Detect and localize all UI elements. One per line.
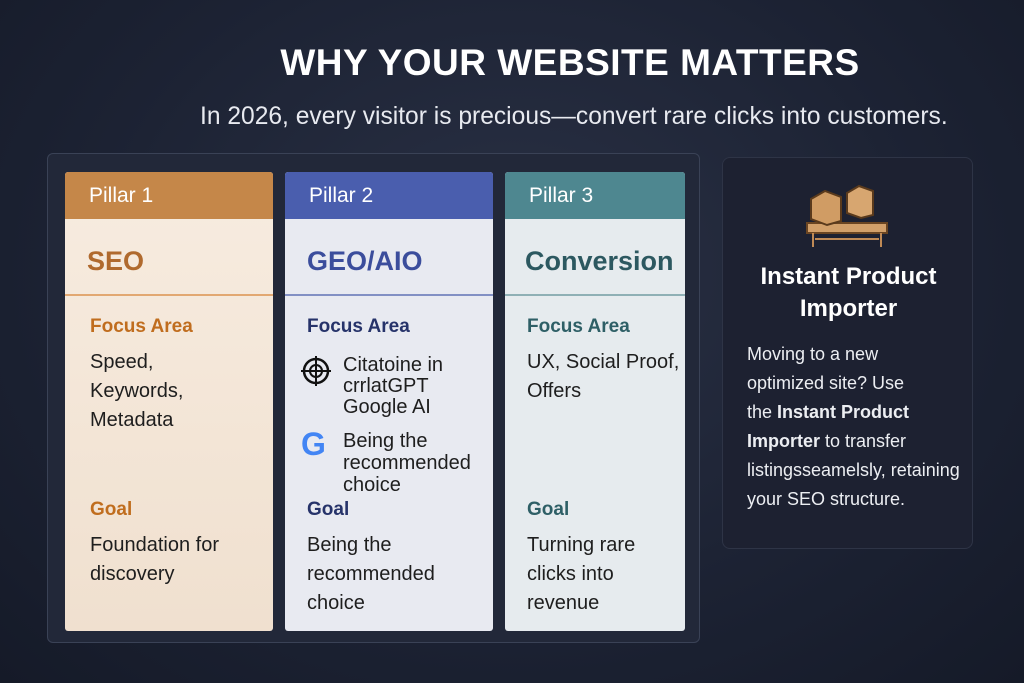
panel: pillars (47, 153, 700, 643)
pillar 2: Google AI (343, 396, 431, 418)
title: WHY YOUR WEBSITE MATTERS (280, 42, 860, 83)
pillar 1: Goal (90, 499, 132, 520)
heading (760, 263, 936, 322)
pillar 2: recommended (307, 563, 435, 585)
pillar 3: Pillar 3 (529, 184, 593, 207)
pillar 3: Goal (527, 499, 569, 520)
heading: Importer (800, 295, 897, 322)
pillar 3: Focus Area (527, 316, 630, 337)
icon: boxes on conveyor (806, 185, 888, 247)
pillar 2: Citatoine in (343, 354, 443, 376)
pillar 1: SEO (87, 246, 144, 276)
pillar 1: Focus Area (90, 316, 193, 337)
icon: google G: G (301, 426, 326, 462)
pillar 1: Speed, (90, 351, 153, 373)
description: optimized site? Use (747, 373, 904, 393)
pillar 3: Offers (527, 380, 581, 402)
pillar 2: Goal (307, 499, 349, 520)
pillar 1: Keywords, (90, 380, 183, 402)
pillar 2: choice (343, 474, 401, 496)
icon: target (301, 356, 331, 386)
pillar 2: recommended (343, 452, 471, 474)
description: listingsseamelsly, retaining (747, 460, 960, 480)
description (747, 344, 960, 509)
pillar 2: Pillar 2 (309, 184, 373, 207)
pillar 1 (65, 172, 273, 631)
description: Moving to a new (747, 344, 878, 364)
pillar 2: Being the (343, 430, 428, 452)
pillar 1: discovery (90, 563, 174, 585)
subtitle: In 2026, every visitor is precious—convert rare clicks into customers. (200, 103, 948, 130)
pillar 3: UX, Social Proof, (527, 351, 679, 373)
pillar 2 (285, 172, 493, 631)
pillar 3 (505, 172, 685, 631)
pillar 1: Foundation for (90, 534, 219, 556)
description: the Instant Product (747, 402, 909, 422)
pillar 3: clicks into (527, 563, 614, 585)
pillar 3: Turning rare (527, 534, 635, 556)
pillar 2: choice (307, 592, 365, 614)
pillar 2: Being the (307, 534, 392, 556)
pillar 3: Conversion (525, 246, 674, 276)
heading: Instant Product (760, 263, 936, 290)
pillar 2: Focus Area (307, 316, 410, 337)
panel: importer (722, 157, 973, 549)
pillar 2: crrlatGPT (343, 375, 429, 397)
description: Importer to transfer (747, 431, 906, 451)
pillar 1: Metadata (90, 409, 173, 431)
pillar 2: GEO/AIO (307, 246, 423, 276)
pillar 1: Pillar 1 (89, 184, 153, 207)
description: your SEO structure. (747, 489, 905, 509)
pillar 3: revenue (527, 592, 599, 614)
